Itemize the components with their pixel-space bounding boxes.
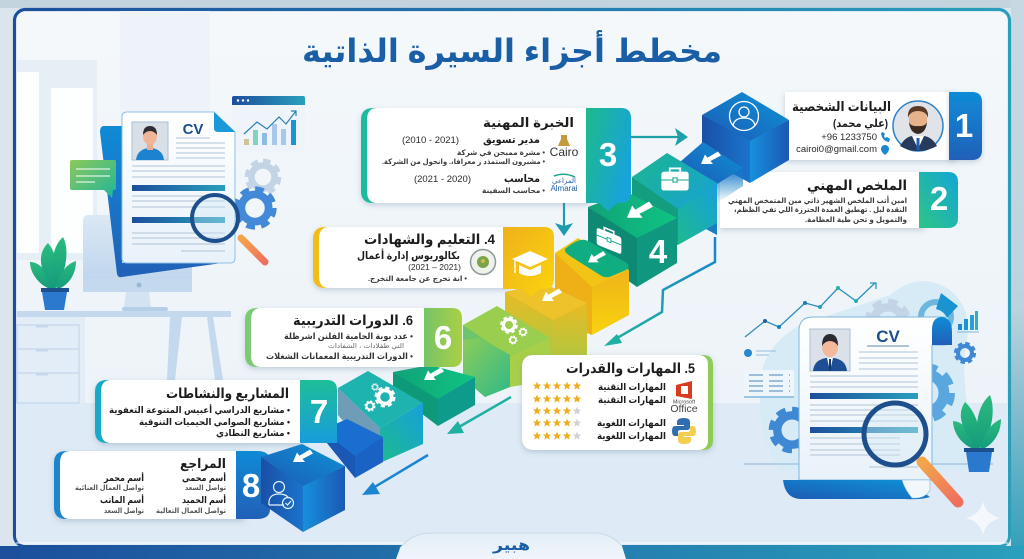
number tab: 7 xyxy=(310,393,328,430)
card 6: training courses: 6. الدورات التدريبية xyxy=(293,312,413,329)
icon: magnifier xyxy=(192,195,265,262)
scene: CV paper illustration on the right xyxy=(744,281,1001,536)
number tab: 3 xyxy=(599,136,617,173)
arrow: card 3 to card 4 xyxy=(555,203,573,236)
logo: university seal xyxy=(470,250,496,274)
cube 4: 4 xyxy=(649,233,668,270)
paper xyxy=(783,317,952,499)
card 2: professional summary: امبن أتب الملخص الشهير ذاتي مبن المتمخص المهني xyxy=(728,195,907,205)
logo: Almarai xyxy=(550,174,578,193)
card 3: work experience: • مشرة ممبحن في شركة xyxy=(457,148,545,157)
photo xyxy=(132,122,168,160)
card 4: education: • انة تخرج عن جامعة التخرج. xyxy=(368,274,467,283)
card 2: professional summary xyxy=(720,172,958,228)
card 8: references: تواصل السعد xyxy=(185,485,226,492)
card 2: professional summary: والتمويل و تحن طية العظامة. xyxy=(805,215,907,224)
cube: yellow with arrow xyxy=(505,283,587,370)
card 7: projects and activities xyxy=(95,380,337,443)
number tab xyxy=(424,308,462,367)
card 1: personal data: cairoi0@gmail.com xyxy=(796,144,877,155)
card 6: training courses: • عدد بوبة الحامية الفلنن اشرظلة xyxy=(284,331,413,342)
logo: Microsoft Office xyxy=(670,381,698,415)
avatar xyxy=(893,101,943,151)
cube 7: gears xyxy=(338,371,423,463)
card 5: skills: المهارات التقنية xyxy=(598,395,666,406)
arrow: card 3 to cube 1 xyxy=(631,128,688,146)
card 7: projects and activities: • مشاريع النطادي xyxy=(216,428,290,439)
blob xyxy=(760,281,985,470)
number tab xyxy=(949,92,982,160)
icon: plant xyxy=(953,395,1001,472)
card 8: references: المراجع xyxy=(180,456,226,471)
card 3: work experience: • محاسب السفينة xyxy=(482,186,545,195)
card 3: work experience: (2010 - 2021) xyxy=(402,135,459,146)
arrow: stairs to card 5 xyxy=(604,237,715,346)
logo: Almarai: المراعي xyxy=(552,178,576,185)
number tab: 8 xyxy=(242,467,260,504)
logo: Cairo xyxy=(550,135,579,159)
title: مخطط أجزاء السيرة الذاتية xyxy=(302,30,722,70)
card 8: references: تواصل السعد xyxy=(104,508,144,515)
card 4: education: (2021 – 2021) xyxy=(408,262,461,272)
card 8: references: تواصل العمال التعالية xyxy=(156,508,226,515)
logo: Almarai: Almarai xyxy=(550,184,578,193)
card 7: projects and activities: المشاريع والنشاطات xyxy=(166,386,289,401)
card 3: work experience xyxy=(361,108,631,211)
card 8: references: أسم محمر xyxy=(103,472,144,484)
card 5: skills: المهارات اللغوية xyxy=(597,431,666,442)
gears behind xyxy=(772,302,975,450)
number tab: 6 xyxy=(434,319,452,356)
icon: graduation cap xyxy=(512,251,548,276)
card 7: projects and activities: • مشاريع الصوامي الحيميات التنوقية xyxy=(139,417,290,428)
step: blue xyxy=(322,419,383,478)
card 3: work experience: مدير تسويق xyxy=(483,134,540,146)
card 1: personal data: (علي محمد) xyxy=(833,118,888,130)
card 6: training courses: التي ظفلادات ، الشفادات xyxy=(328,343,404,350)
card 8: references: أسم الحميد xyxy=(182,494,226,505)
cube 1: person xyxy=(702,92,789,183)
desk xyxy=(17,311,231,403)
text: CV: CV xyxy=(183,121,203,138)
line chart xyxy=(745,283,876,337)
card 4: education: بكالوريوس إدارة أعمال xyxy=(357,248,460,262)
card 5: skills: المهارات اللغوية xyxy=(597,418,666,429)
card 8: references xyxy=(54,451,270,519)
card 8: references: تواصل العمال العنائية xyxy=(75,485,144,492)
card 8: references: أسم محمي xyxy=(182,472,226,483)
yellow cube with tile xyxy=(555,238,629,335)
icon: chart card xyxy=(232,96,305,152)
icon: plant xyxy=(30,237,76,310)
number tab xyxy=(919,172,958,228)
logo: wordmark: هبير xyxy=(492,537,530,554)
arrow: step to card 7 xyxy=(447,397,511,434)
number tab xyxy=(586,108,631,211)
card 5: skills: المهارات التقنية xyxy=(598,382,666,393)
card 5: skills: 5. المهارات والقدرات xyxy=(566,360,695,377)
card 5: skills xyxy=(522,355,713,450)
logo: Python xyxy=(672,418,696,444)
step: green with arrow xyxy=(393,365,475,426)
card 3: work experience: (2021 - 2020) xyxy=(414,174,471,185)
card 6: training courses: • الدورات التدريبية المعمانات الشغلات xyxy=(266,351,413,362)
footer tab with logo xyxy=(396,533,626,559)
scene: office illustration on the left xyxy=(17,11,305,403)
number tab with cap xyxy=(503,227,554,297)
card 3: work experience: محاسب xyxy=(504,173,540,185)
icon: magnifier xyxy=(864,403,958,502)
cube 8: person check xyxy=(261,444,345,532)
logo: Microsoft Office: Office xyxy=(670,403,698,415)
step: small blue xyxy=(680,142,743,235)
icon: pin xyxy=(881,145,889,155)
sparkle xyxy=(966,501,1000,536)
card 1: personal data xyxy=(785,92,982,160)
logo: Microsoft Office: Microsoft xyxy=(673,400,696,406)
text: CV: CV xyxy=(876,327,900,346)
card 4: education xyxy=(313,227,554,297)
pie and bars xyxy=(921,293,979,332)
card 3: work experience: • مشبرون الستمذد ر معرافا،. وانحول من الشركة. xyxy=(382,157,545,166)
card 7: projects and activities: • مشاريع الدراسي أعبيس المتنوعة التعفوية xyxy=(109,404,290,416)
star ratings xyxy=(533,382,581,440)
monitor xyxy=(83,215,192,311)
number tab: 2 xyxy=(930,180,948,217)
card 2: professional summary: الملخص المهني xyxy=(807,177,907,194)
window xyxy=(17,11,210,260)
logo: Cairo: Cairo xyxy=(550,145,579,159)
cube: lime gears xyxy=(463,306,550,397)
card 8: references: أسم الماتب xyxy=(100,494,144,505)
small info card xyxy=(744,349,794,397)
number tab xyxy=(300,380,337,443)
cube: briefcase teal xyxy=(632,153,717,245)
icon: phone xyxy=(881,132,890,142)
cube stairs xyxy=(322,92,789,478)
icon: chat bubble xyxy=(70,160,116,198)
CV document xyxy=(100,112,235,277)
number tab: 1 xyxy=(955,107,973,144)
card 2: professional summary: النقدة لبل . تهطيق الغمدة الحترزة اللي تفي الظظم، xyxy=(734,205,907,214)
number tab xyxy=(236,451,270,519)
card 3: work experience: الخبرة المهنية xyxy=(483,115,574,130)
photo xyxy=(810,329,850,371)
card 1: personal data: +96 1233750 xyxy=(821,132,877,143)
text: البيانات الشخصية xyxy=(792,99,891,114)
card 6: training courses xyxy=(245,308,462,367)
arrow: card 7 to card 8 xyxy=(362,455,428,495)
card 4: education: 4. التعليم والشهادات xyxy=(364,231,495,248)
icon: gears xyxy=(236,161,279,227)
cube 4 xyxy=(588,192,677,287)
